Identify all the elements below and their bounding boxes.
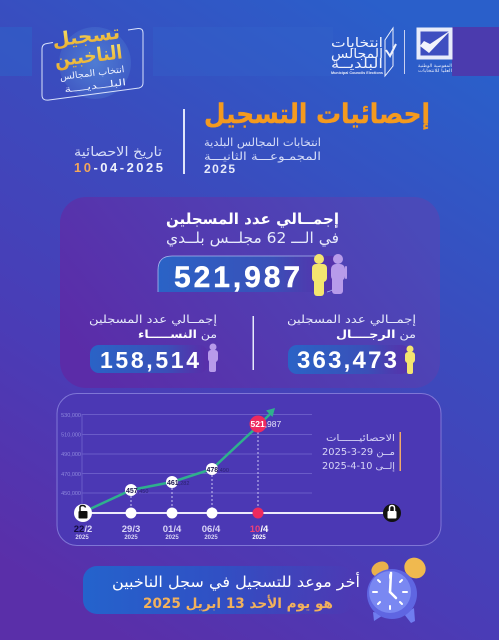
heading: total registered bbox=[166, 210, 339, 248]
subtitle: 2025 bbox=[204, 162, 235, 176]
main title: إحصائيات التسجيل bbox=[204, 99, 430, 130]
statistics period note bbox=[322, 432, 401, 472]
data point: 29/3: 457,450 bbox=[126, 488, 148, 495]
date labels: 06/4 bbox=[202, 524, 221, 535]
badge: voter registration: تسجيل bbox=[51, 21, 121, 52]
heading: total registered: في الـــ 62 مجلــس بلــدي bbox=[166, 229, 339, 248]
statistics period note: إلــى 10-4-2025 bbox=[322, 461, 395, 472]
timeline axis bbox=[83, 512, 392, 514]
statistics period note: الاحصائيــــــات bbox=[326, 433, 395, 444]
logo: municipal councils elections: المجالس bbox=[331, 47, 383, 62]
dotted droplines bbox=[131, 432, 258, 510]
date labels: 2025 bbox=[204, 535, 218, 541]
icon: man bbox=[405, 346, 415, 374]
icon: open lock bbox=[74, 504, 92, 522]
data point: 10/4 highlight bbox=[250, 416, 282, 518]
column: men bbox=[287, 313, 416, 374]
badge: voter registration: البلـــديــــة bbox=[64, 78, 127, 96]
panel: timeline chart bbox=[57, 394, 441, 546]
statistics period note: مــن 29-3-2025 bbox=[322, 447, 395, 458]
icon: alarm clock bbox=[367, 553, 430, 623]
badge: voter registration: الناخبين bbox=[53, 41, 124, 71]
icon: woman bbox=[208, 344, 218, 372]
logo: high national elections commission: العليا للانتخابات bbox=[418, 69, 452, 74]
date labels: 29/3 bbox=[122, 524, 140, 535]
data point: 29/3 bbox=[125, 484, 148, 518]
date labels: 22/2 bbox=[74, 524, 92, 535]
total pill bbox=[158, 256, 336, 294]
statistics date bbox=[74, 145, 163, 175]
chart axis labels: 490,000 bbox=[61, 452, 81, 458]
callout: registration deadline bbox=[83, 566, 360, 614]
chart axis labels: 530,000 bbox=[61, 413, 81, 419]
data point: 06/4: 478,490 bbox=[206, 467, 229, 474]
chart axis labels: 470,000 bbox=[61, 472, 81, 478]
logo: high national elections commission bbox=[418, 30, 452, 74]
panel: registered totals bbox=[60, 197, 440, 388]
chart axis labels bbox=[61, 413, 81, 497]
heading: total registered: إجمــالي عدد المسجلين bbox=[166, 210, 339, 228]
chart axis labels: 510,000 bbox=[61, 432, 81, 438]
icon: closed lock bbox=[383, 504, 401, 522]
badge: voter registration: انتخاب المجالس bbox=[59, 65, 125, 83]
data point: 01/4: 461,282 bbox=[167, 480, 189, 487]
column: women: إجمــالي عدد المسجلين bbox=[89, 313, 217, 326]
date labels: 01/4 bbox=[163, 524, 182, 535]
date labels: 10/4 bbox=[250, 524, 269, 535]
data point: 06/4 bbox=[206, 463, 229, 518]
logo: municipal councils elections: انتخابات bbox=[331, 36, 383, 51]
logo: municipal councils elections: البلديــة bbox=[331, 57, 383, 72]
icon: man figure bbox=[312, 254, 327, 296]
date labels bbox=[74, 524, 269, 541]
icon: woman figure bbox=[331, 254, 347, 294]
date labels: 2025 bbox=[124, 535, 138, 541]
statistics date: تاريخ الاحصائية bbox=[74, 145, 162, 160]
date labels: 2025 bbox=[75, 535, 89, 541]
badge: voter registration bbox=[42, 21, 143, 100]
date labels: 2025 bbox=[252, 535, 266, 541]
chart axis labels: 450,000 bbox=[61, 491, 81, 497]
column divider bbox=[252, 316, 254, 370]
total pill: 521,987 bbox=[174, 261, 300, 294]
column: women bbox=[89, 313, 218, 373]
logo: municipal councils elections bbox=[331, 28, 405, 76]
subtitle bbox=[204, 136, 321, 176]
subtitle: انتخابات المجالس البلدية bbox=[204, 136, 321, 149]
data point: 10/4 highlight: 521,987 bbox=[250, 419, 282, 429]
column: men: إجمــالي عدد المسجلين bbox=[287, 313, 416, 326]
data point: 01/4 bbox=[166, 476, 189, 518]
header divider bbox=[183, 109, 185, 174]
column: women: من النســـــاء bbox=[138, 328, 217, 341]
column: men: من الرجــــال bbox=[336, 328, 416, 341]
faint header band bbox=[0, 27, 499, 76]
statistics date: 10-04-2025 bbox=[74, 160, 163, 175]
date labels: 2025 bbox=[165, 535, 179, 541]
callout: registration deadline: هو يوم الأحد 13 ابريل 2025 bbox=[143, 595, 333, 612]
subtitle: المجمـوعـــة الثانيـــة bbox=[204, 150, 321, 163]
column: women: 158,514 bbox=[100, 347, 199, 373]
logo: municipal councils elections: Municipal Councils Elections bbox=[331, 70, 384, 75]
callout: registration deadline: أخر موعد للتسجيل في سجل الناخبين bbox=[112, 572, 360, 592]
column: men: 363,473 bbox=[297, 347, 397, 374]
logo: high national elections commission: المفوضية الوطنية bbox=[418, 64, 452, 69]
trend line bbox=[90, 408, 275, 509]
